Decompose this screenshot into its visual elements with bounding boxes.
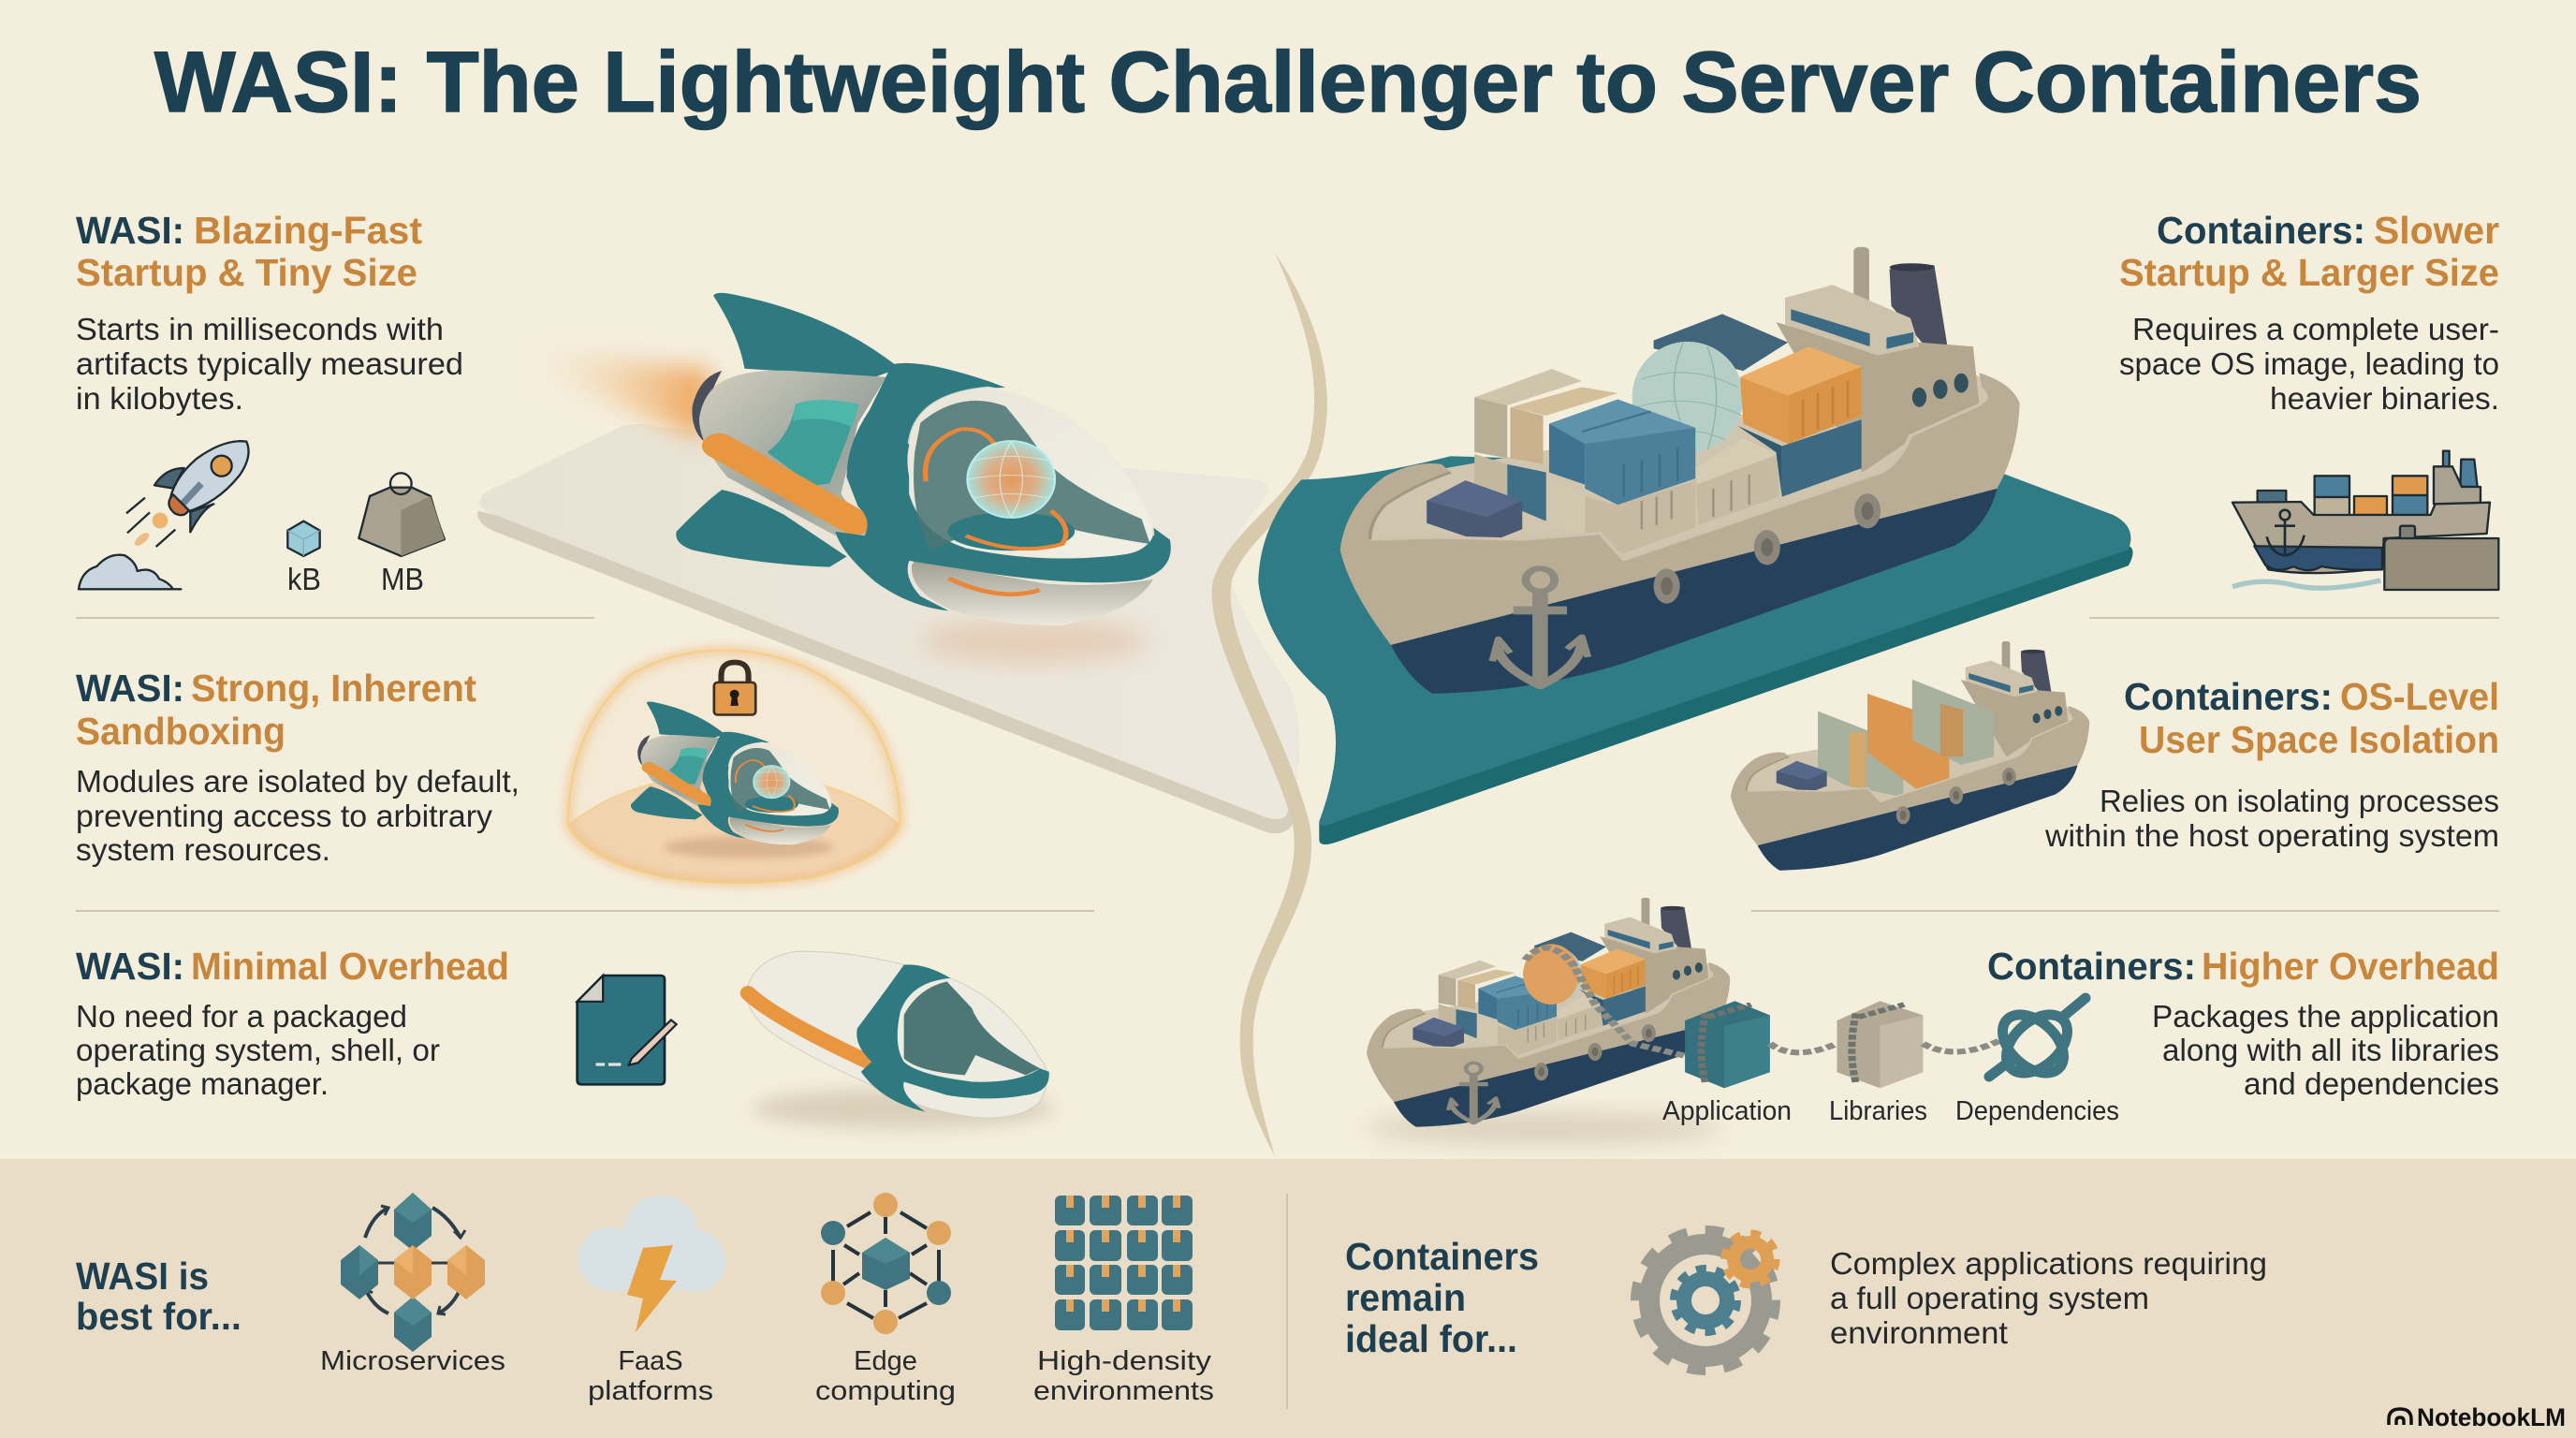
panel: WASI startup text: Startup & Tiny Size (76, 251, 417, 294)
icon: small cargo ship at dock (2232, 451, 2498, 590)
main container ship (1340, 247, 2020, 694)
label: Microservices: Microservices (320, 1346, 505, 1376)
label: FaaS platforms (588, 1346, 713, 1406)
main WASI rocket (676, 293, 1171, 625)
panel: WASI overhead text: No need for a packaged (76, 999, 407, 1034)
panel: WASI overhead text (76, 945, 509, 1101)
panel: containers startup text: Containers: (2157, 209, 2365, 252)
panel: containers overhead text: Packages the application (2152, 999, 2499, 1034)
panel: containers overhead text: Containers: (1987, 945, 2196, 988)
icon: padlock (714, 662, 755, 715)
panel: containers startup text: Slower (2374, 209, 2499, 252)
divider (2089, 617, 2499, 619)
heading: Containers remain ideal for: remain (1345, 1276, 1466, 1319)
panel: WASI sandboxing text: Modules are isolated by default, (76, 764, 520, 799)
heading: Containers remain ideal for (1345, 1235, 1539, 1360)
heading: WASI is best for: best for... (76, 1295, 242, 1338)
icon: small rocket launching from cloud (79, 441, 249, 589)
chained ship with application, libraries and dependencies (1367, 898, 2086, 1143)
NotebookLM logo: NotebookLM (2417, 1403, 2566, 1431)
icon: kB cube (287, 521, 320, 556)
label: High-density environments: environments (1033, 1376, 1214, 1406)
title: WASI: The Lightweight Challenger to Server Containers (154, 35, 2422, 130)
panel: containers startup text: heavier binaries. (2270, 381, 2499, 416)
panel: containers startup text (2119, 209, 2499, 416)
panel: WASI overhead text: Minimal Overhead (191, 945, 509, 988)
label: FaaS platforms: FaaS (618, 1346, 683, 1376)
panel: WASI sandboxing text: Sandboxing (76, 710, 285, 753)
icon: microservices (341, 1193, 485, 1352)
rocket capsule, shell removed (746, 951, 1054, 1129)
panel: WASI startup text (76, 209, 463, 416)
panel: WASI startup text: Blazing-Fast (194, 209, 422, 252)
panel: containers isolation text: Relies on isolating processes (2100, 784, 2499, 818)
panel: WASI sandboxing text (76, 667, 520, 867)
panel: WASI overhead text: WASI: (76, 945, 184, 988)
panel: containers isolation text: within the host operating system (2044, 818, 2499, 853)
panel: containers isolation text: OS-Level (2340, 675, 2499, 718)
panel: WASI startup text: in kilobytes. (76, 381, 243, 416)
rocket shadow (922, 619, 1147, 664)
panel: WASI startup text: WASI: (76, 209, 184, 252)
label: High-density environments (1033, 1346, 1214, 1406)
icon: document with pen (578, 976, 677, 1084)
divider (76, 910, 1094, 912)
panel: WASI sandboxing text: preventing access to arbitrary (76, 799, 493, 833)
panel: containers overhead text: Higher Overhead (2202, 945, 2499, 988)
panel: WASI startup text: artifacts typically measured (76, 346, 463, 381)
label: Edge computing (815, 1346, 956, 1406)
panel: WASI sandboxing text: system resources. (76, 832, 330, 867)
panel: containers overhead text: along with all its libraries (2162, 1033, 2499, 1067)
panel: WASI overhead text: package manager. (76, 1066, 329, 1101)
panel: containers isolation text: User Space Isolation (2139, 718, 2499, 761)
text: complex applications: Complex applications requiring (1830, 1246, 2267, 1281)
divider (1751, 910, 2499, 912)
icon: MB weight (359, 473, 445, 556)
box: application (1685, 1001, 1770, 1088)
divider (1286, 1194, 1288, 1409)
panel: WASI startup text: Starts in milliseconds with (76, 312, 444, 346)
icon: edge computing network (821, 1193, 951, 1334)
small ship with isolated walls (1731, 641, 2089, 871)
panel: containers isolation text (2044, 675, 2499, 853)
text: complex applications: environment (1830, 1315, 2008, 1350)
text: complex applications (1830, 1246, 2267, 1350)
label: High-density environments: High-density (1037, 1346, 1212, 1376)
panel: containers overhead text: and dependencies (2244, 1066, 2499, 1101)
icon: gears (1636, 1231, 1777, 1370)
label: MB: MB (381, 562, 424, 596)
divider (76, 617, 594, 619)
panel: containers startup text: space OS image, leading to (2119, 346, 2499, 381)
heading: WASI is best for: WASI is (76, 1255, 209, 1298)
panel: WASI sandboxing text: WASI: (76, 667, 184, 710)
label: Application: Application (1662, 1096, 1792, 1126)
panel: containers isolation text: Containers: (2124, 675, 2333, 718)
label: Libraries: Libraries (1829, 1096, 1927, 1126)
text: complex applications: a full operating system (1830, 1281, 2149, 1315)
panel: containers startup text: Startup & Larger Size (2119, 251, 2499, 294)
panel: WASI overhead text: operating system, shell, or (76, 1033, 440, 1067)
wave divider ribbon (1212, 253, 1327, 1156)
small rocket inside dome (631, 702, 839, 858)
heading: WASI is best for (76, 1255, 242, 1338)
label: FaaS platforms: platforms (588, 1376, 713, 1406)
icon: high-density grid (1055, 1196, 1193, 1330)
sandbox dome with rocket (568, 651, 900, 883)
heading: Containers remain ideal for: ideal for... (1345, 1317, 1517, 1360)
label: Edge computing: Edge (854, 1346, 917, 1376)
label: Dependencies: Dependencies (1955, 1096, 2119, 1126)
icon: dependency knot (1989, 998, 2086, 1084)
box: libraries (1837, 1001, 1923, 1088)
platform: teal sea (1258, 456, 2133, 844)
label: Edge computing: computing (815, 1376, 956, 1406)
label: kB: kB (287, 562, 321, 596)
panel: WASI sandboxing text: Strong, Inherent (191, 667, 476, 710)
icon: FaaS cloud and bolt (578, 1196, 725, 1332)
panel: containers overhead text (1987, 945, 2499, 1101)
heading: Containers remain ideal for: Containers (1345, 1235, 1539, 1278)
bottom band (0, 1159, 2576, 1438)
platform: white slab (477, 424, 1300, 833)
panel: containers startup text: Requires a complete user- (2132, 312, 2499, 346)
rocket exhaust flame (552, 351, 711, 440)
